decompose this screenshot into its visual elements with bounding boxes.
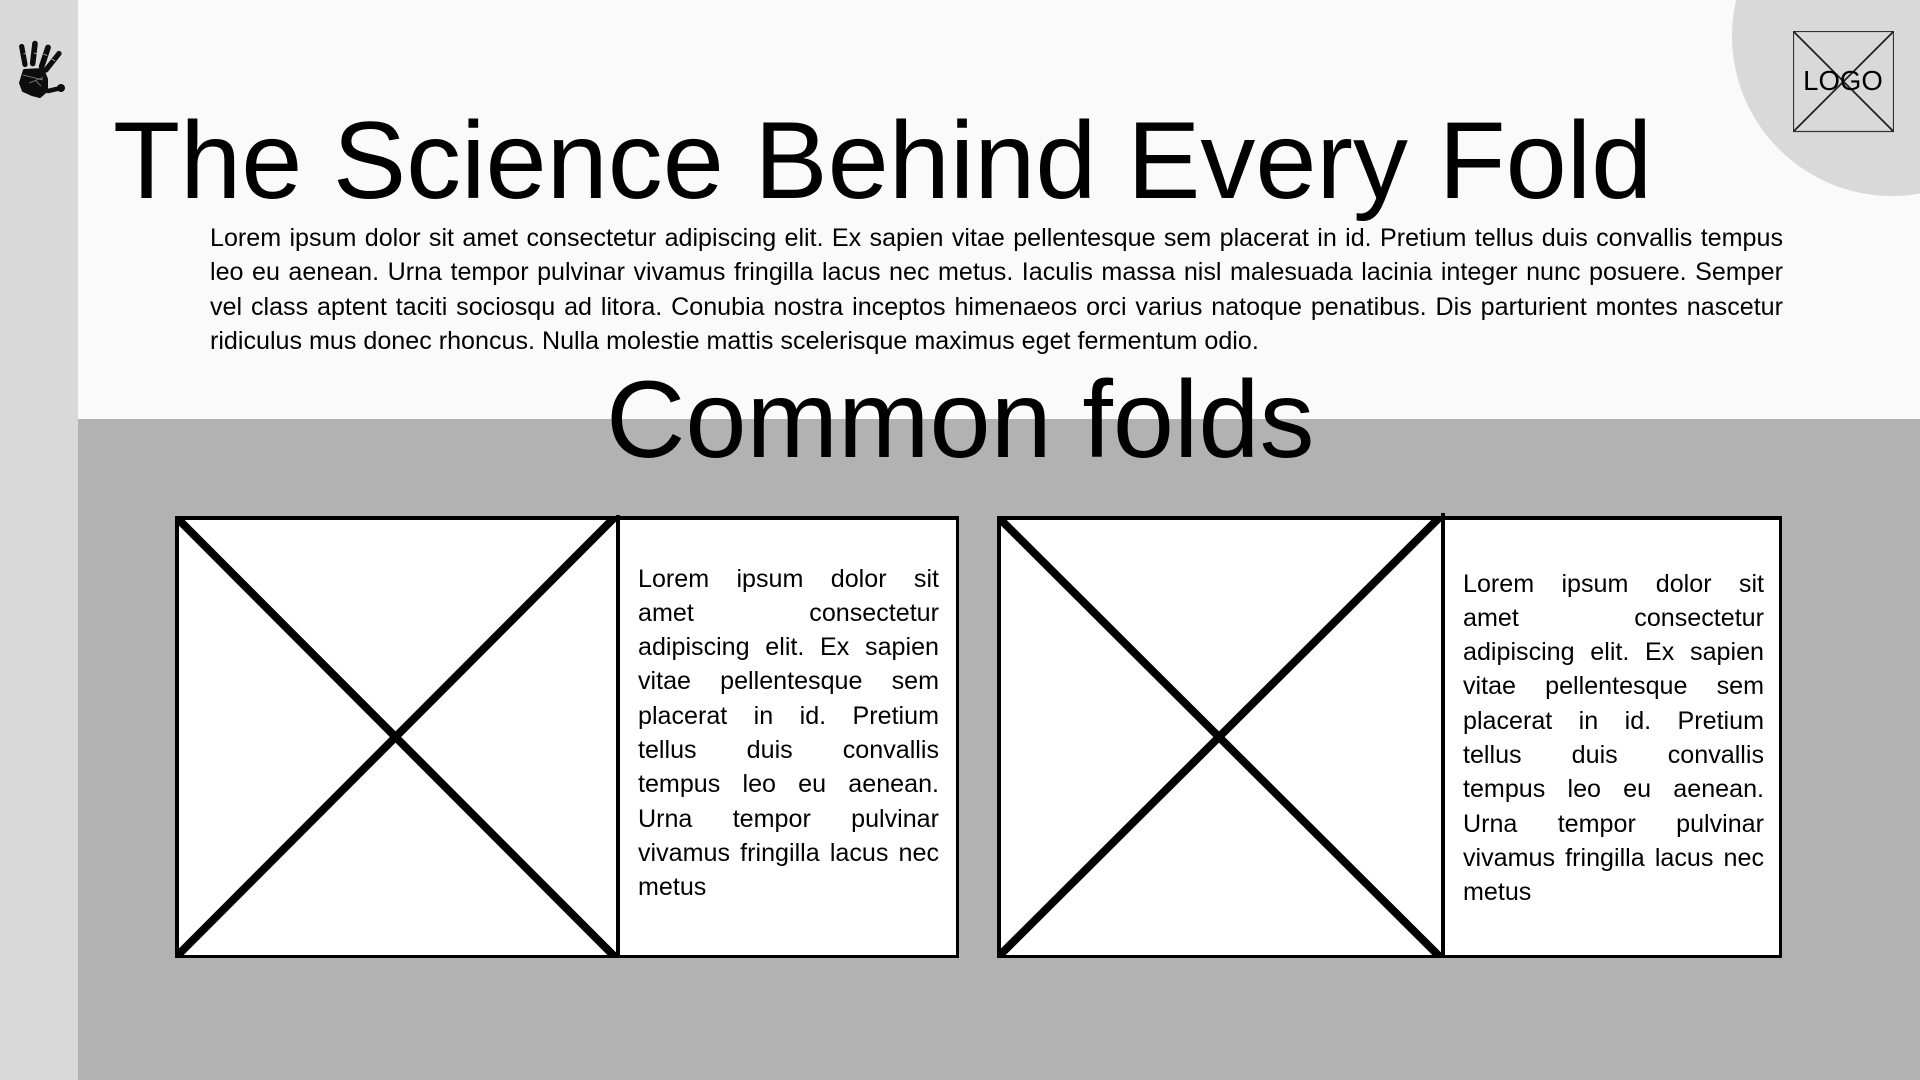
right card text: vitae pellentesque sem <box>1463 672 1764 700</box>
logo circle <box>1732 0 1920 196</box>
intro text block: ridiculus mus donec rhoncus. Nulla molestie mattis scelerisque maximus eget fermentum odio. <box>210 327 1259 355</box>
left card text: Lorem ipsum dolor sit <box>638 564 939 592</box>
left card text: vitae pellentesque sem <box>638 667 939 695</box>
intro text block: leo eu aenean. Urna tempor pulvinar vivamus fringilla lacus nec metus. Iaculis massa nisl malesuada lacinia integer nunc posuere. Semper <box>210 258 1783 286</box>
right card text: adipiscing elit. Ex sapien <box>1463 638 1764 666</box>
right card text <box>1463 570 1764 906</box>
left card text: placerat in id. Pretium <box>638 702 939 730</box>
right card text: metus <box>1463 878 1531 906</box>
left card text <box>638 564 939 901</box>
right card text: tempus leo eu aenean. <box>1463 775 1764 803</box>
right card text: amet consectetur <box>1463 604 1764 632</box>
background: lower grey band <box>78 419 1920 1080</box>
left card text: metus <box>638 873 706 901</box>
right card text: Urna tempor pulvinar <box>1463 810 1764 838</box>
left card text: tempus leo eu aenean. <box>638 770 939 798</box>
intro text block: vel class aptent taciti sociosqu ad litora. Conubia nostra inceptos himenaeos orci varius natoque penatibus. Dis parturient montes nascetur <box>210 293 1783 321</box>
left card text: amet consectetur <box>638 599 939 627</box>
sidebar <box>0 0 78 1080</box>
right card text: Lorem ipsum dolor sit <box>1463 570 1764 598</box>
logo crossed box <box>1793 31 1894 132</box>
left card text: tellus duis convallis <box>638 736 939 764</box>
left card text: adipiscing elit. Ex sapien <box>638 633 939 661</box>
intro text block: Lorem ipsum dolor sit amet consectetur adipiscing elit. Ex sapien vitae pellentesque sem placerat in id. Pretium tellus duis convallis tempus <box>210 224 1783 252</box>
logo placeholder <box>1793 31 1894 132</box>
section heading: Common folds <box>606 359 1314 481</box>
left card text: vivamus fringilla lacus nec <box>638 839 939 867</box>
panel: right fold card <box>997 516 1782 958</box>
right card text: tellus duis convallis <box>1463 741 1764 769</box>
left card image placeholder <box>179 515 620 955</box>
logo text: LOGO <box>1803 64 1883 96</box>
title: The Science Behind Every Fold <box>113 100 1652 222</box>
right card text: vivamus fringilla lacus nec <box>1463 844 1764 872</box>
left card text: Urna tempor pulvinar <box>638 805 939 833</box>
right card image placeholder <box>1001 513 1445 955</box>
icon: hand print <box>19 40 65 98</box>
right card text: placerat in id. Pretium <box>1463 707 1764 735</box>
panel: left fold card <box>175 516 959 958</box>
intro text block <box>210 224 1783 355</box>
